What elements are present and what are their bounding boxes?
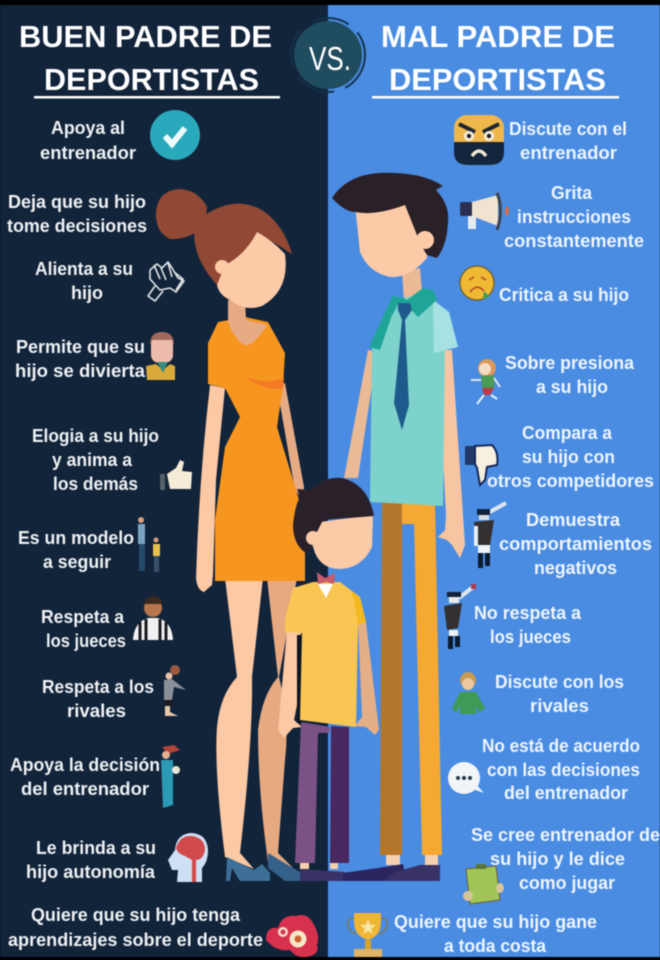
left column labels <box>7 118 263 950</box>
label: grita instrucciones: constantemente <box>504 231 644 251</box>
label: discute con el entrenador: Discute con el <box>509 119 627 139</box>
heel left <box>226 857 270 881</box>
label: no respeta a los jueces: No respeta a <box>474 603 582 623</box>
label: respeta a los jueces: Respeta a <box>41 607 125 627</box>
bow tie <box>317 572 335 584</box>
arm left <box>278 630 302 738</box>
label: ganar a toda costa: a toda costa <box>444 936 547 956</box>
neck <box>228 300 267 345</box>
left arm <box>344 350 377 478</box>
label: se cree entrenador: Se cree entrenador de <box>471 825 660 845</box>
label: alienta a su hijo: hijo <box>71 283 103 303</box>
title: mal padre: MAL PADRE DE <box>381 19 615 54</box>
label: deja que su hijo: tome decisiones <box>7 216 147 236</box>
label: elogia a su hijo <box>32 426 159 494</box>
label: modelo a seguir: Es un modelo <box>18 528 134 548</box>
dress <box>208 317 305 581</box>
label: compara a su hijo: Compara a <box>522 423 613 443</box>
boy shoes <box>300 869 345 881</box>
label: discute con el entrenador <box>509 119 627 163</box>
socks <box>300 863 309 869</box>
label: apoya la decision: Apoya la decisión <box>10 755 160 775</box>
figure: father <box>332 173 465 865</box>
icon: clapping hands <box>148 262 184 301</box>
label: permite que se divierta: Permite que su <box>16 337 145 357</box>
icon: tactics clipboard <box>463 864 504 904</box>
label: grita instrucciones: instrucciones <box>517 207 631 227</box>
label: se cree entrenador: su hijo y le dice <box>490 849 625 869</box>
icon: megaphone <box>460 193 509 230</box>
right column labels <box>394 119 660 956</box>
hair <box>293 478 374 554</box>
shirt <box>370 292 445 506</box>
figure: boy <box>278 478 379 869</box>
pants left <box>295 722 330 863</box>
face <box>217 232 286 308</box>
label: comportamientos negativos: comportamientos <box>499 534 652 554</box>
face <box>355 205 427 277</box>
right arm <box>437 350 465 558</box>
icon: referee gesturing <box>474 503 506 568</box>
label: respeta a los rivales <box>42 677 154 721</box>
arm right <box>355 622 379 735</box>
icon: referee <box>133 596 173 640</box>
neck <box>402 268 422 302</box>
icon: trophy <box>348 913 387 957</box>
icon: parent and child <box>138 517 160 572</box>
label: respeta a los rivales: Respeta a los <box>42 677 154 697</box>
figure: shoes <box>226 853 440 881</box>
vs badge <box>291 18 365 92</box>
label: ganar a toda costa <box>394 912 597 956</box>
hair <box>332 173 448 258</box>
label: deja que su hijo <box>7 192 147 236</box>
pants right <box>402 503 442 855</box>
label: compara a su hijo: otros competidores <box>487 471 654 491</box>
back arm <box>277 383 304 500</box>
icon: check badge <box>150 110 200 160</box>
label: alienta a su hijo <box>35 259 133 303</box>
label: no esta de acuerdo: del entrenador <box>504 783 628 803</box>
label: critica a su hijo: Critica a su hijo <box>499 285 629 305</box>
panel: buen padre background <box>0 5 328 957</box>
pants right <box>330 726 349 863</box>
icon: rival player <box>164 665 186 716</box>
label: apoya al entrenador: entrenador <box>40 143 136 163</box>
label: aprendizajes: aprendizajes sobre el deporte <box>8 930 263 950</box>
label: autonomia: hijo autonomía <box>26 862 156 882</box>
icon: flower gears <box>266 915 318 957</box>
icon: crying face <box>460 266 494 300</box>
label: elogia a su hijo: y anima a <box>52 450 133 470</box>
label: permite que se divierta: hijo se divierta <box>15 361 146 381</box>
label: comportamientos negativos: negativos <box>534 558 617 578</box>
icon: green child <box>452 672 485 714</box>
icon: thumbs down <box>465 445 497 485</box>
title: buen padre: DEPORTISTAS <box>44 62 259 97</box>
label: alienta a su hijo: Alienta a su <box>35 259 133 279</box>
label: compara a su hijo: su hijo con <box>522 447 615 467</box>
panel: mal padre background <box>328 5 660 957</box>
icon: speech bubble <box>448 762 484 794</box>
label: modelo a seguir: a seguir <box>43 552 111 572</box>
title: mal padre: DEPORTISTAS <box>389 62 606 97</box>
label: grita instrucciones: Grita <box>551 183 593 203</box>
label: no esta de acuerdo <box>482 736 640 803</box>
collar <box>392 288 437 317</box>
label: permite que se divierta <box>15 337 146 381</box>
label: sobre presiona <box>505 353 635 397</box>
icon: running child <box>471 359 500 404</box>
vs badge: VS. <box>309 40 351 77</box>
label: se cree entrenador: como jugar <box>519 873 615 893</box>
label: deja que su hijo: Deja que su hijo <box>8 192 146 212</box>
title: buen padre <box>19 19 280 98</box>
icon: coach <box>161 745 180 808</box>
icon: referee with red card <box>444 584 476 649</box>
label: no respeta a los jueces: los jueces <box>490 627 571 647</box>
label: respeta a los jueces: los jueces <box>46 631 126 651</box>
icon: head with brain <box>168 833 208 882</box>
label: autonomia: Le brinda a su <box>36 838 156 858</box>
label: grita instrucciones <box>504 183 644 251</box>
shirt <box>285 582 366 727</box>
label: apoya al entrenador <box>40 118 136 163</box>
ankles <box>386 855 400 865</box>
label: discute con los rivales: Discute con los <box>495 672 624 692</box>
label: apoya al entrenador: Apoya al <box>51 118 125 138</box>
label: comportamientos negativos: Demuestra <box>526 510 621 530</box>
face <box>310 515 373 569</box>
label: modelo a seguir <box>18 528 134 572</box>
label: discute con los rivales: rivales <box>530 696 589 716</box>
front arm <box>196 385 225 592</box>
front leg <box>216 578 263 869</box>
label: elogia a su hijo: Elogia a su hijo <box>32 426 159 446</box>
label: discute con los rivales <box>495 672 624 716</box>
label: no respeta a los jueces <box>474 603 582 647</box>
label: apoya la decision: del entrenador <box>21 779 149 799</box>
back leg <box>258 578 297 868</box>
label: sobre presiona: a su hijo <box>536 377 608 397</box>
label: apoya la decision <box>10 755 160 799</box>
label: discute con el entrenador: entrenador <box>520 143 617 163</box>
tie <box>394 303 412 430</box>
hair bun <box>156 189 207 239</box>
label: sobre presiona: Sobre presiona <box>505 353 635 373</box>
father shoe right <box>383 865 440 881</box>
label: se cree entrenador <box>471 825 660 893</box>
pants left <box>380 503 402 855</box>
figure: mother <box>156 189 305 869</box>
label: elogia a su hijo: los demás <box>53 474 138 494</box>
label: ganar a toda costa: Quiere que su hijo gane <box>394 912 597 932</box>
heel right <box>268 853 300 881</box>
label: autonomia <box>26 838 156 882</box>
hair <box>194 204 292 287</box>
father shoe left <box>343 864 405 881</box>
label: no esta de acuerdo: con las decisiones <box>487 760 640 780</box>
shadow <box>297 635 302 723</box>
label: respeta a los jueces <box>41 607 126 651</box>
icon: thumbs up <box>160 460 192 490</box>
label: compara a su hijo <box>487 423 654 491</box>
label: comportamientos negativos <box>499 510 652 578</box>
label: no esta de acuerdo: No está de acuerdo <box>482 736 640 756</box>
label: aprendizajes <box>8 905 263 950</box>
icon: angry mask <box>454 115 504 165</box>
label: respeta a los rivales: rivales <box>67 701 126 721</box>
icon: boy bust <box>146 332 175 380</box>
title: buen padre: BUEN PADRE DE <box>19 19 272 54</box>
label: aprendizajes: Quiere que su hijo tenga <box>31 905 241 925</box>
title: mal padre <box>372 19 619 98</box>
